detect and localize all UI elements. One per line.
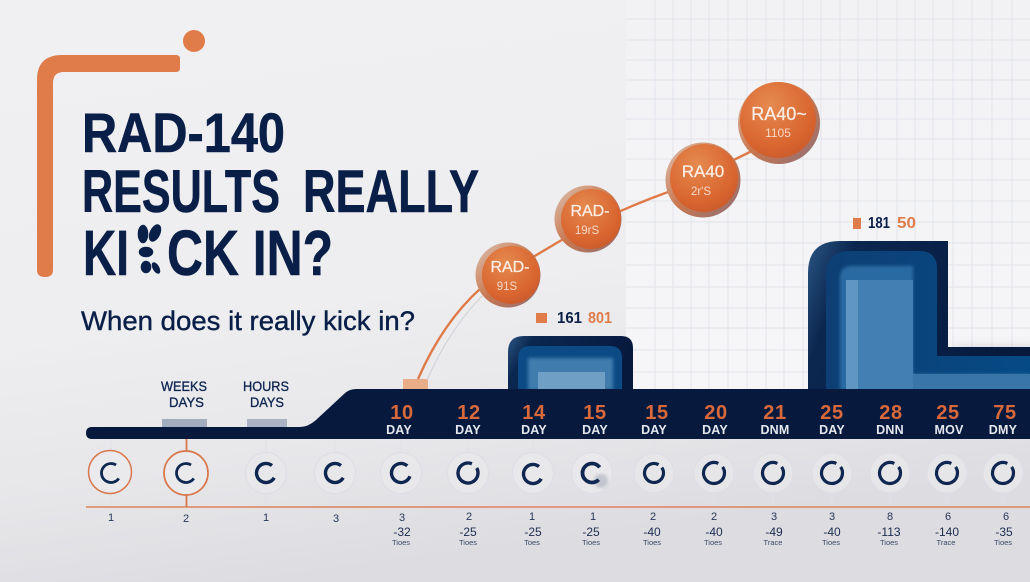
column numbers: Tioes [822, 538, 840, 547]
day labels on timeline: 15 [645, 402, 669, 424]
day labels on timeline: DAY [386, 423, 412, 437]
column numbers: -35 [995, 525, 1013, 539]
label: hours days: DAYS [250, 394, 284, 410]
grid panel [626, 0, 1030, 389]
column numbers: 2 [466, 511, 472, 523]
ring 13 [870, 453, 910, 493]
label: weeks days [161, 378, 207, 410]
title: KI [83, 217, 129, 289]
faint secondary curve [427, 296, 482, 380]
milestone bubble 1 [476, 242, 540, 308]
column numbers: -40 [823, 525, 841, 539]
milestone bubble 1: 91S [497, 281, 518, 293]
column numbers: 8 [887, 511, 893, 523]
title: REALLY [303, 158, 479, 225]
column numbers: Trace [937, 538, 955, 547]
column numbers: Toes [524, 538, 540, 547]
orange baseline [86, 506, 1030, 508]
marker: weeks tab [162, 419, 207, 427]
milestone bubble 2: RAD- [570, 203, 610, 220]
column numbers [108, 511, 1013, 547]
milestone bubble 3: RA40 [682, 162, 724, 181]
column numbers: -113 [877, 525, 901, 539]
ring 12 [812, 453, 852, 493]
legend: 181 50: 50 [897, 215, 916, 232]
timeline band [86, 389, 1030, 439]
ring 10 [694, 453, 734, 493]
column numbers: -40 [643, 525, 661, 539]
day labels on timeline: 28 [879, 402, 903, 424]
column numbers: Tioes [994, 538, 1012, 547]
day labels on timeline [386, 402, 1018, 437]
day labels on timeline: DAY [455, 423, 481, 437]
day labels on timeline: DNM [760, 423, 790, 437]
column numbers: -25 [524, 525, 542, 539]
day labels on timeline: 21 [763, 402, 787, 424]
progress rings row [88, 450, 1023, 495]
column numbers: Tioes [459, 538, 477, 547]
column numbers: Tioes [880, 538, 898, 547]
ring 7 [512, 452, 554, 494]
column numbers: 2 [711, 511, 717, 523]
day labels on timeline: 10 [390, 402, 414, 424]
column numbers: 3 [399, 512, 405, 524]
day labels on timeline: 25 [820, 402, 844, 424]
milestone bubble 2: 19rS [575, 225, 599, 237]
column guide lines [111, 439, 1003, 507]
marker: hours tab [247, 419, 287, 427]
legend: 161 801: 801 [588, 310, 612, 327]
legend: 181 50 [853, 215, 916, 232]
ring 6 [448, 452, 488, 494]
column numbers: 2 [183, 513, 189, 525]
column numbers: -40 [705, 525, 723, 539]
column numbers: -32 [393, 525, 411, 539]
ring 1 [88, 450, 132, 494]
title: RESULTS [82, 158, 280, 225]
accent bracket [37, 55, 180, 277]
day labels on timeline: DAY [521, 423, 547, 437]
milestone bubble 4: 1105 [765, 126, 791, 140]
column numbers: 3 [771, 511, 777, 523]
orange tick [186, 439, 188, 507]
legend: 161 801 [536, 310, 612, 327]
day labels on timeline: DAY [641, 423, 667, 437]
title: RAD-140 [82, 101, 285, 164]
column numbers: 3 [829, 511, 835, 523]
column numbers: -25 [582, 525, 600, 539]
milestone bubble 4 [738, 82, 820, 164]
day labels on timeline: 14 [522, 402, 546, 424]
column numbers: 1 [590, 511, 596, 523]
growth curve [418, 151, 752, 379]
ring 4 [314, 452, 356, 494]
label: weeks days: DAYS [169, 394, 204, 410]
ring 5 [380, 452, 422, 494]
column numbers: Trace [764, 538, 782, 547]
milestone bubble 3: 2r'S [691, 186, 711, 198]
day labels on timeline: DAY [582, 423, 608, 437]
ring 3 [246, 452, 286, 494]
day labels on timeline: MOV [934, 423, 964, 437]
milestone bubble 4: RA40~ [751, 104, 807, 124]
day labels on timeline: DAY [819, 423, 845, 437]
day labels on timeline: DNN [876, 423, 904, 437]
milestone bubble 3 [666, 142, 740, 218]
column numbers: 3 [333, 513, 339, 525]
bar: small blue block [508, 336, 633, 390]
label: weeks days: WEEKS [161, 378, 207, 394]
ring 9 [634, 453, 674, 493]
marker: orange tab [403, 379, 428, 389]
milestone bubble 1: RAD- [490, 259, 530, 276]
ring 14 [927, 453, 967, 493]
column numbers: Tioes [582, 538, 600, 547]
column numbers: Tioes [392, 538, 410, 547]
subtitle: When does it really kick in? [81, 306, 415, 336]
accent dot [183, 30, 205, 52]
ring 2 [164, 451, 208, 495]
column numbers: Tioes [704, 538, 722, 547]
column numbers: -25 [459, 525, 477, 539]
column numbers: 6 [945, 511, 951, 523]
column numbers: 2 [650, 511, 656, 523]
label: hours days [243, 378, 289, 410]
ring 11 [753, 453, 793, 493]
day labels on timeline: 12 [457, 402, 481, 424]
label: hours days: HOURS [243, 378, 289, 394]
day labels on timeline: 20 [704, 402, 728, 424]
column numbers: -49 [765, 525, 783, 539]
bar: large stepped blue block [808, 241, 1030, 390]
ring 8 [572, 452, 612, 494]
column numbers: 6 [1003, 511, 1009, 523]
legend: 161 801: 161 [557, 310, 582, 327]
ring 15 [983, 453, 1023, 493]
day labels on timeline: 25 [936, 402, 960, 424]
legend: 181 50: 181 [868, 215, 890, 232]
column numbers: -140 [935, 525, 959, 539]
column numbers: Tioes [643, 538, 661, 547]
column numbers: 1 [263, 512, 269, 524]
milestone bubble 2 [554, 186, 622, 252]
column numbers: 1 [108, 512, 114, 524]
day labels on timeline: DAY [702, 423, 728, 437]
title: CK IN? [167, 217, 333, 289]
day labels on timeline: 75 [993, 402, 1017, 424]
column numbers: 1 [529, 511, 535, 523]
day labels on timeline: 15 [583, 402, 607, 424]
day labels on timeline: DMY [989, 423, 1018, 437]
title [82, 101, 479, 289]
